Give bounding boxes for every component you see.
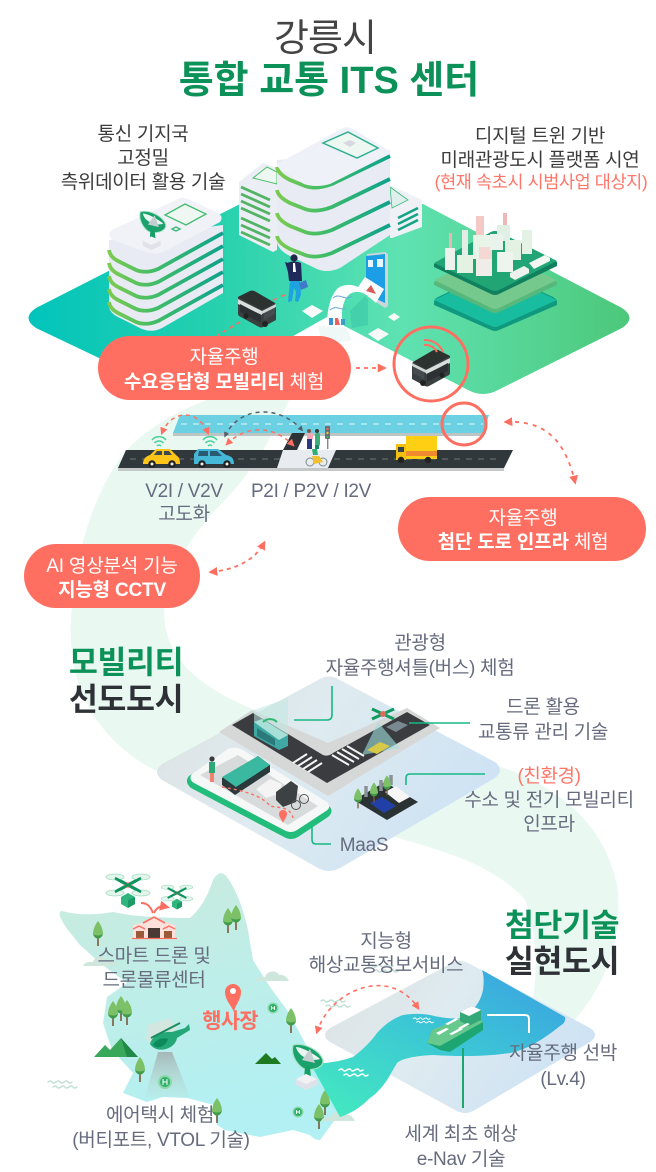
dark road (118, 450, 513, 468)
green platform (28, 204, 630, 394)
dashed route (273, 285, 308, 300)
panel: Gangneung map (48, 873, 398, 1140)
label: V2I (145, 481, 223, 525)
building: main tower (277, 127, 390, 271)
EV charging station (354, 775, 418, 820)
arrow: satellite to sea (317, 986, 418, 1032)
label: autonomous ship (509, 1042, 617, 1090)
arrow: callout to shuttle (356, 367, 384, 369)
phone and data scroll (318, 252, 388, 345)
label: e-Nav (404, 1123, 518, 1170)
trees (93, 905, 330, 1129)
label: eco infrastructure (464, 765, 634, 835)
truck (396, 436, 437, 463)
label: drone center: 스마트 드론 및 (97, 945, 211, 967)
label: base station: 측위데이터 활용 기술 (61, 171, 225, 193)
callout: demand-response mobility (98, 336, 351, 400)
pale ribbon background (71, 398, 618, 1040)
building: left wing (239, 163, 277, 252)
heading: advanced tech city (505, 907, 619, 979)
drone and monitored taxi (362, 709, 408, 755)
panel: ITS center isometric platform (28, 127, 630, 394)
label: tourist shuttle (326, 632, 514, 679)
data tiles (302, 305, 400, 341)
helipad badges (268, 1002, 304, 1118)
label: e-Nav: 세계 최초 해상 (404, 1123, 518, 1145)
label: base station: 고정밀 (117, 147, 169, 169)
callout: advanced road infrastructure: 첨단 도로 인프라 체험 (438, 531, 608, 553)
title: 강릉시 (274, 18, 376, 60)
label: digital twin: (현재 속초시 시범사업 대상지) (435, 172, 647, 192)
label: autonomous ship: 자율주행 선박 (509, 1042, 617, 1064)
heading: mobility city: 모빌리티 (69, 644, 183, 680)
label: eco infrastructure: 인프라 (523, 813, 575, 835)
building: right wing (390, 185, 422, 238)
label: air taxi: 에어택시 체험 (106, 1104, 214, 1126)
shuttle at platform (238, 291, 276, 328)
canal road (173, 415, 489, 433)
label: marine info: 지능형 (360, 930, 412, 952)
label: tourist shuttle: 자율주행셔틀(버스) 체험 (326, 657, 514, 679)
label: marine info: 해상교통정보서비스 (309, 954, 463, 976)
drones with parcels (106, 874, 193, 910)
label: V2I: 고도화 (158, 503, 210, 525)
person (285, 254, 308, 302)
arrow: road to infrastructure callout (506, 422, 575, 482)
title: 통합 교통 ITS 센터 (179, 60, 479, 102)
callout: demand-response mobility: 수요응답형 모빌리티 체험 (124, 371, 324, 393)
callout lines (463, 1015, 529, 1108)
label: autonomous ship: (Lv.4) (540, 1069, 586, 1090)
autonomous shuttle bus (254, 698, 288, 750)
panel: marine area (292, 961, 595, 1117)
callout: demand-response mobility: 자율주행 (189, 346, 259, 368)
drone logistics center (132, 903, 177, 938)
crosswalk (277, 450, 336, 468)
pedestrians, signal, cyclist (306, 426, 330, 466)
connection arcs (162, 412, 302, 445)
water channel (310, 970, 565, 1117)
taxi (143, 449, 180, 468)
icon: wifi signals (152, 437, 217, 446)
label: e-Nav: e-Nav 기술 (417, 1148, 505, 1170)
label: air taxi: (버티포트, VTOL 기술) (72, 1129, 250, 1151)
icon: highlighted shuttle (394, 327, 468, 401)
label: marine info (309, 930, 463, 976)
event venue pin: 행사장 (202, 1010, 258, 1033)
building: base station (109, 198, 223, 331)
heading: mobility city: 선도도시 (69, 681, 183, 717)
label: MaaS: MaaS (340, 835, 388, 856)
heading: mobility city (69, 644, 183, 717)
callout: intelligent CCTV: 지능형 CCTV (58, 579, 166, 601)
label: drone traffic (478, 696, 608, 743)
label: digital twin: 디지털 트윈 기반 (475, 125, 605, 147)
city on layered plates (434, 213, 557, 331)
mountains (94, 1038, 281, 1064)
label: P2I: P2I / P2V / I2V (251, 481, 372, 502)
label: eco infrastructure: (친환경) (517, 765, 581, 787)
callout: advanced road infrastructure (398, 497, 646, 561)
label: digital twin (435, 125, 647, 192)
blue car (194, 449, 234, 468)
heading: advanced tech city: 실현도시 (505, 943, 619, 979)
road scene (118, 403, 513, 471)
label: drone center: 드론물류센터 (102, 969, 206, 991)
arrow: CCTV (211, 543, 264, 572)
callout: advanced road infrastructure: 자율주행 (488, 507, 558, 529)
label: eco infrastructure: 수소 및 전기 모빌리티 (464, 789, 634, 811)
waves (339, 1018, 434, 1076)
highlight circle on canal road (442, 403, 486, 445)
phone MaaS map (187, 748, 332, 839)
label: tourist shuttle: 관광형 (394, 632, 446, 654)
label: base station (61, 123, 225, 193)
label: V2I: V2I / V2V (145, 481, 223, 502)
label: base station: 통신 기지국 (98, 123, 188, 145)
panel: mobility isometric district (157, 676, 500, 871)
icon: satellite dish (292, 1044, 323, 1090)
title (179, 18, 479, 102)
callout lines (294, 686, 485, 844)
event venue pin (202, 984, 258, 1033)
label: drone center (97, 945, 211, 991)
label: drone traffic: 교통류 관리 기술 (478, 721, 608, 743)
helicopter and vertiport beam (145, 1018, 190, 1097)
label: drone traffic: 드론 활용 (506, 696, 580, 718)
arrow: shuttle to callout (218, 322, 240, 335)
road intersection (219, 708, 440, 796)
callout: intelligent CCTV: AI 영상분석 기능 (46, 555, 178, 577)
clouds and waves (48, 956, 398, 1121)
callout: intelligent CCTV (24, 544, 200, 608)
heading: advanced tech city: 첨단기술 (505, 907, 619, 943)
label: air taxi (72, 1104, 250, 1151)
label: digital twin: 미래관광도시 플랫폼 시연 (441, 149, 639, 171)
autonomous ship (427, 1006, 483, 1052)
